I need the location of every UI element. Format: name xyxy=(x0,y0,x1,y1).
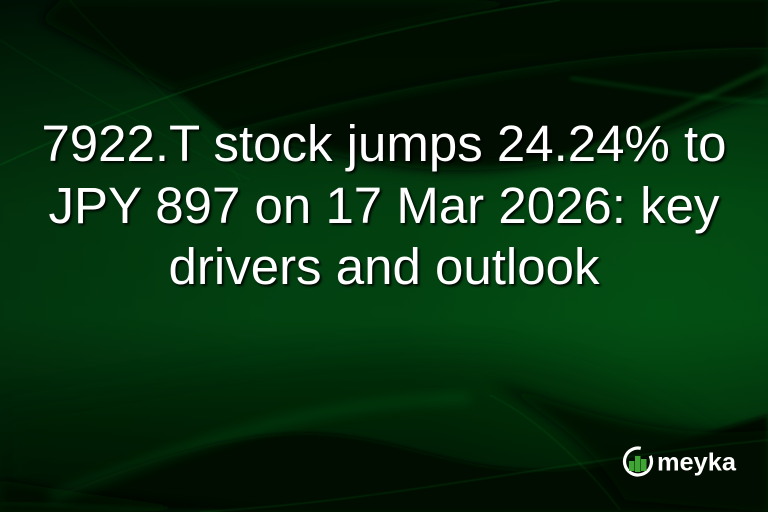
bottom dark mass xyxy=(84,414,768,510)
title: JPY 897 on 17 Mar 2026: key xyxy=(48,176,720,234)
wordmark: meyka xyxy=(657,448,737,476)
top dark wedge xyxy=(40,0,560,92)
title xyxy=(41,115,728,295)
top dark pocket xyxy=(225,48,768,170)
title: 7922.T stock jumps 24.24% to xyxy=(41,115,727,172)
icon: circular arrow with bars xyxy=(620,444,656,479)
bottom haze xyxy=(334,362,662,421)
logo: meyka xyxy=(622,446,737,477)
title: drivers and outlook xyxy=(169,238,599,295)
